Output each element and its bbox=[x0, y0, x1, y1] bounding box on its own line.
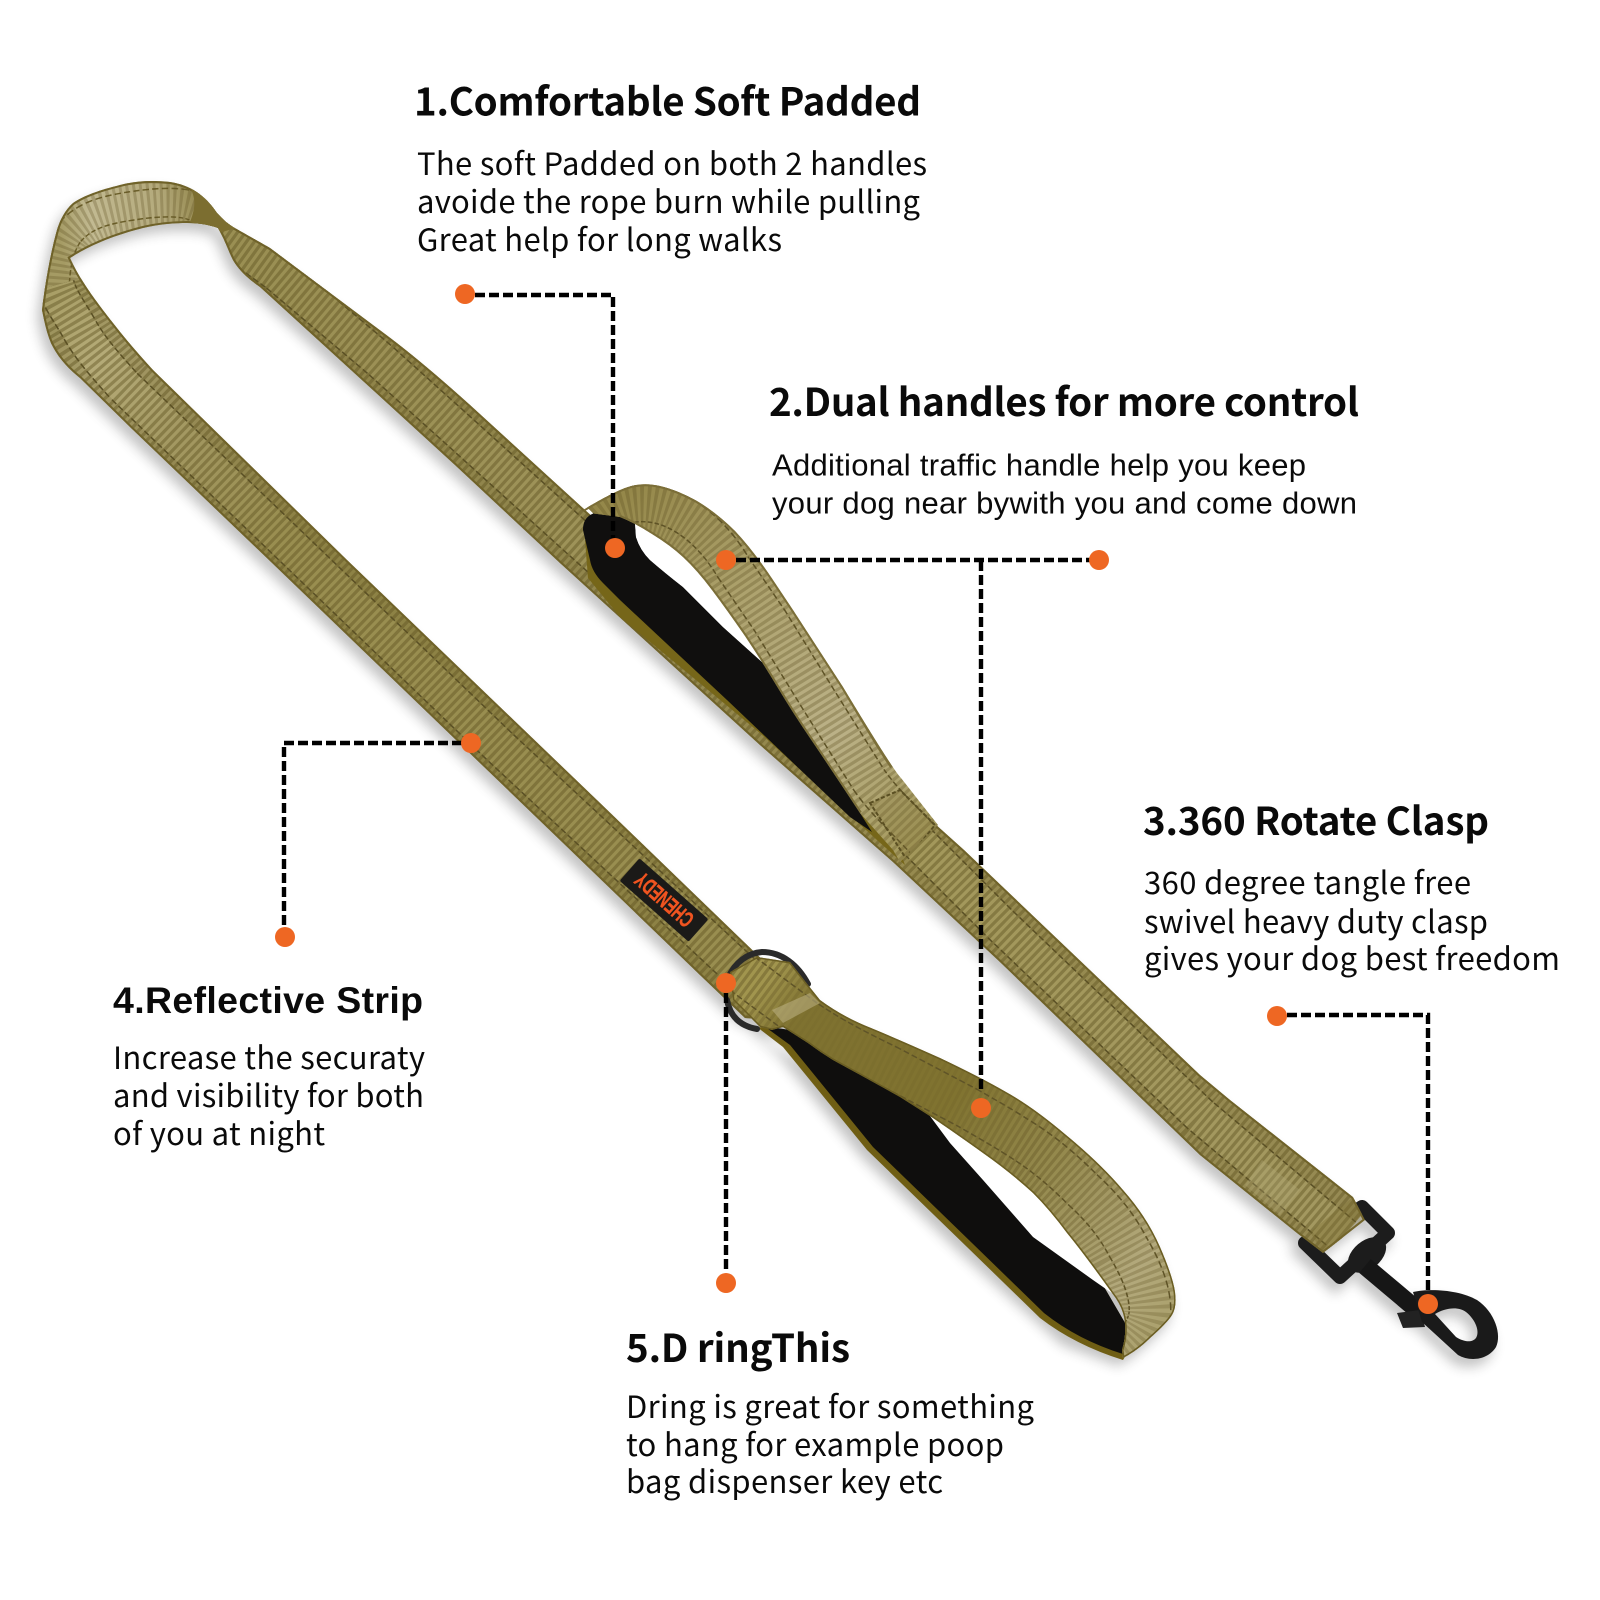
body 5 bbox=[626, 1382, 1035, 1502]
brand label: CHENEDY bbox=[630, 867, 699, 932]
black padding bbox=[583, 512, 872, 832]
body 2: your dog near bywith you and come down bbox=[772, 486, 1357, 520]
body 5: Dring is great for something bbox=[626, 1382, 1035, 1427]
handle webbing bbox=[583, 484, 935, 860]
olive edge under pad bbox=[585, 540, 905, 865]
body 3 bbox=[1144, 858, 1560, 979]
callout 1: padded handle bbox=[455, 284, 625, 558]
brand label bbox=[620, 858, 708, 942]
hook bbox=[1413, 1290, 1498, 1359]
stitched box bbox=[870, 790, 935, 860]
feature 2 text bbox=[769, 372, 1359, 520]
body 5: bag dispenser key etc bbox=[626, 1457, 943, 1502]
heading 3: 3.360 Rotate Clasp bbox=[1143, 791, 1489, 847]
D ring bbox=[728, 952, 808, 984]
body 5: to hang for example poop bbox=[626, 1420, 1004, 1465]
fold highlight bbox=[772, 993, 820, 1023]
clasp loop bbox=[1305, 1207, 1388, 1277]
heading 5: 5.D ringThis bbox=[626, 1318, 850, 1374]
heading 4: 4.Reflective Strip bbox=[113, 979, 423, 1021]
body 2: Additional traffic handle help you keep bbox=[772, 448, 1306, 482]
body 3: swivel heavy duty clasp bbox=[1144, 897, 1488, 942]
callout 4: reflective strip bbox=[275, 733, 481, 947]
body 3: 360 degree tangle free bbox=[1144, 858, 1471, 903]
feature 4 text bbox=[113, 979, 425, 1154]
callout 2: dual handles bbox=[716, 550, 1109, 1118]
body 4 bbox=[113, 1033, 425, 1154]
handle opening bbox=[635, 523, 762, 662]
handle webbing bbox=[730, 957, 1176, 1358]
shaft bbox=[1365, 1266, 1422, 1314]
body 1: The soft Padded on both 2 handles bbox=[417, 139, 927, 184]
body 4: and visibility for both bbox=[113, 1071, 424, 1116]
callout 3: clasp bbox=[1267, 1006, 1438, 1314]
body 4: of you at night bbox=[113, 1109, 325, 1154]
heading 2: 2.Dual handles for more control bbox=[769, 372, 1359, 428]
feature 5 text bbox=[626, 1318, 1035, 1502]
feature 1 text bbox=[414, 72, 927, 260]
swivel bbox=[1341, 1230, 1393, 1280]
product shadow bbox=[37, 189, 1493, 1367]
feature 3 text bbox=[1143, 791, 1560, 979]
swivel clasp bbox=[1305, 1207, 1498, 1359]
body 1: Great help for long walks bbox=[417, 215, 782, 260]
body 3: gives your dog best freedom bbox=[1144, 934, 1560, 979]
black padding bbox=[764, 1026, 1135, 1354]
body 1 bbox=[417, 139, 927, 260]
lower handle bbox=[730, 957, 1176, 1360]
olive edge bbox=[757, 1027, 1135, 1360]
handle opening bbox=[927, 1112, 1116, 1296]
strap end reinforcement bbox=[1245, 1160, 1300, 1215]
body 2 bbox=[772, 448, 1357, 520]
body 4: Increase the securaty bbox=[113, 1033, 425, 1078]
upper traffic handle bbox=[583, 484, 935, 865]
loop twist bbox=[190, 188, 235, 232]
heading 1: 1.Comfortable Soft Padded bbox=[414, 72, 921, 128]
leash bbox=[42, 181, 1498, 1360]
D ring lower arc bbox=[727, 1000, 757, 1029]
main strap with loop handle bbox=[42, 181, 1365, 1253]
callout 5: D ring bbox=[716, 973, 736, 1293]
thumb lever bbox=[1397, 1310, 1425, 1328]
body 1: avoide the rope burn while pulling bbox=[417, 177, 921, 222]
